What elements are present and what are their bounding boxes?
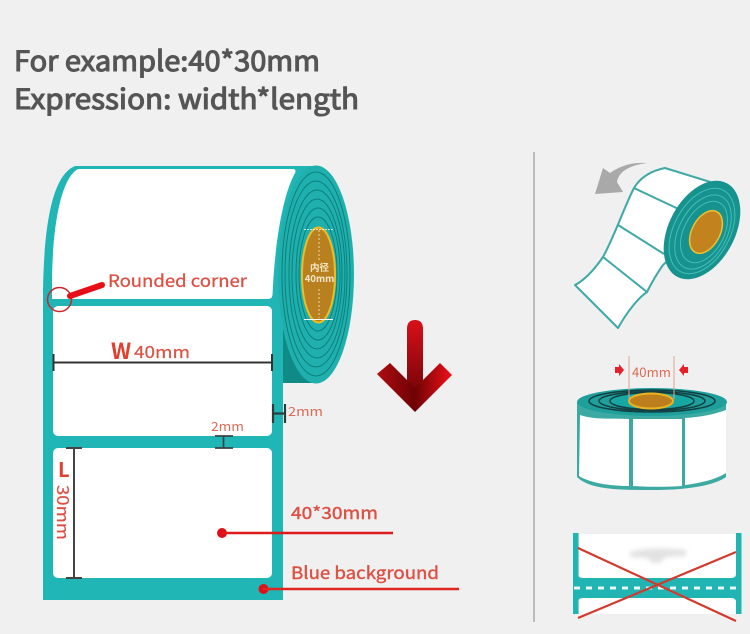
label strip [575, 168, 720, 328]
core [683, 205, 729, 259]
background callout [258, 559, 459, 594]
panel: main label roll diagram [43, 166, 459, 600]
size callout [217, 499, 393, 538]
dimension: 40mm [632, 362, 671, 381]
roll side [648, 168, 750, 292]
size callout: 40*30mm [291, 499, 378, 524]
rounded corner callout [48, 267, 247, 312]
length dimension [52, 448, 82, 578]
panel: unrolling roll [575, 163, 750, 328]
arrow: red down arrow [377, 320, 452, 412]
length dimension: 30mm [52, 485, 76, 540]
title [14, 40, 359, 118]
length dimension: L [58, 454, 70, 483]
width dimension: 40mm [134, 339, 190, 363]
first label, curling around the roll [52, 169, 296, 299]
panel: incorrect layout crossed out [573, 533, 742, 621]
divider [533, 152, 535, 622]
roll body [577, 402, 726, 490]
arrow: grey unwind direction [595, 163, 647, 194]
title: For example:40*30mm [14, 40, 320, 80]
width dimension: W [111, 334, 131, 366]
dimension [615, 356, 688, 399]
title: Expression: width*length [14, 78, 359, 118]
second label [53, 306, 272, 436]
background callout: Blue background [291, 559, 439, 584]
width dimension [53, 334, 272, 371]
label strip backing [43, 166, 318, 600]
label gap dimension [211, 416, 244, 448]
panel: standing roll with 40mm width [577, 356, 727, 490]
roll core with inner diameter: 内径 [310, 260, 329, 274]
roll core with inner diameter: 40mm [305, 271, 334, 285]
label divisions [603, 188, 687, 292]
roll core with inner diameter [302, 228, 335, 322]
top of roll [577, 388, 727, 416]
rounded corner callout: Rounded corner [108, 267, 247, 292]
roll side shadow [283, 290, 318, 383]
label gap dimension: 2mm [211, 416, 244, 435]
core [629, 394, 673, 408]
side gap dimension: 2mm [288, 401, 323, 420]
red cross [578, 548, 736, 621]
side gap dimension [273, 401, 323, 423]
label faces [579, 415, 629, 486]
third label [53, 448, 272, 578]
roll end with wound layers [278, 166, 354, 384]
